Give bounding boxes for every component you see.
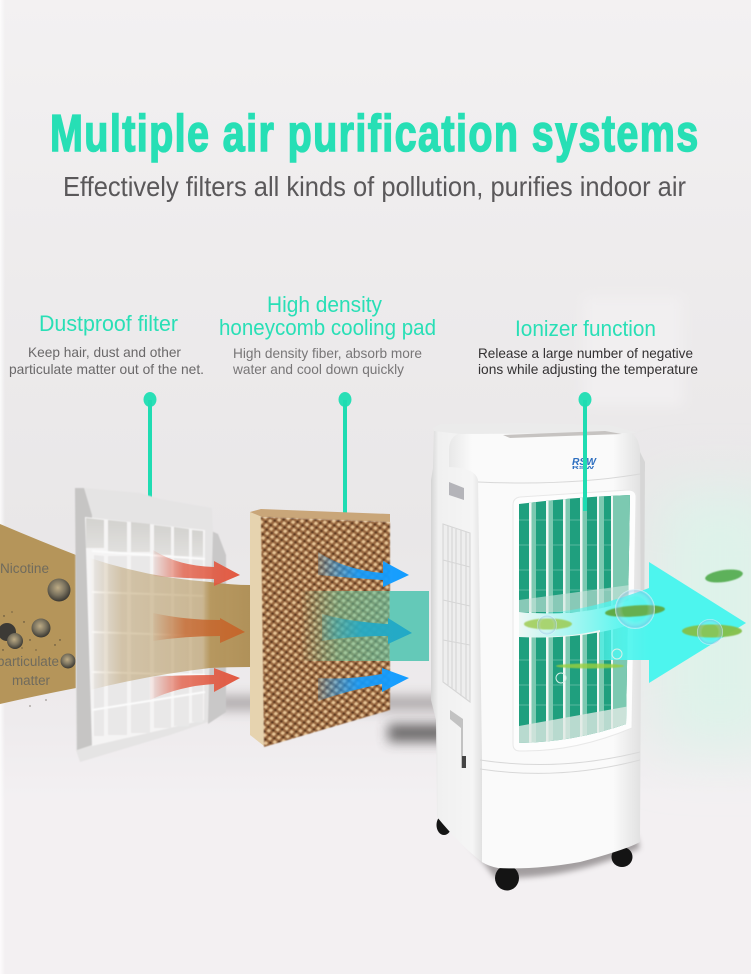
drain clip — [450, 710, 463, 768]
side panel — [431, 428, 483, 863]
polluted air stream — [0, 524, 76, 707]
panel: ionizer function text — [478, 316, 698, 377]
description: dustproof filter: particulate matter out of the net. — [9, 361, 204, 377]
teal clean air band — [300, 591, 429, 661]
connector line: ionizer — [578, 392, 591, 511]
description: ionizer function — [478, 345, 698, 377]
connector line: dustproof filter — [143, 392, 156, 513]
clean air arrow — [519, 562, 746, 683]
panel: honeycomb cooling pad text — [219, 292, 436, 377]
blue arrows — [318, 552, 412, 701]
window frame — [513, 490, 636, 751]
panel: dustproof filter text — [9, 311, 204, 377]
cooler casters — [436, 815, 632, 890]
heading: honeycomb cooling pad — [219, 292, 436, 340]
label: particulate matter: matter — [12, 673, 50, 688]
side vent grille — [443, 524, 470, 702]
label: particulate matter — [0, 654, 59, 688]
green louvre window — [519, 495, 630, 743]
description: ionizer function: Release a large number of negative — [478, 345, 693, 361]
dustproof filter frame — [75, 488, 226, 762]
description: honeycomb cooling pad: water and cool down quickly — [232, 361, 404, 377]
side clip — [640, 452, 645, 660]
heading: ionizer function: Ionizer function — [515, 316, 656, 341]
air cooler unit — [431, 423, 645, 890]
floor shadow — [455, 825, 640, 878]
honeycomb cooling pad — [250, 392, 390, 747]
brand logo: RSW — [572, 456, 597, 468]
seam lines — [478, 474, 640, 773]
leaves and bubbles — [524, 567, 744, 683]
front shell — [449, 431, 642, 868]
subtitle: Effectively filters all kinds of pollution, purifies indoor air — [63, 171, 686, 202]
heading: dustproof filter: Dustproof filter — [39, 311, 178, 336]
description: dustproof filter — [9, 344, 204, 377]
middle band — [519, 600, 630, 638]
polluted air passing through filter — [90, 558, 250, 690]
description: honeycomb cooling pad — [232, 345, 422, 377]
title: Multiple air purification systems — [50, 104, 698, 162]
control strip — [503, 431, 622, 438]
description: ionizer function: ions while adjusting the temperature — [478, 361, 698, 377]
description: honeycomb cooling pad: High density fiber, absorb more — [233, 345, 422, 361]
handle recess — [449, 482, 464, 500]
connector line: cooling pad — [338, 392, 351, 513]
heading: honeycomb cooling pad: High density — [267, 292, 382, 317]
red arrows — [150, 550, 245, 700]
heading: honeycomb cooling pad: honeycomb cooling pad — [219, 315, 436, 340]
top control lid — [433, 423, 638, 434]
brand logo: RSW — [572, 465, 596, 470]
description: dustproof filter: Keep hair, dust and other — [28, 344, 181, 360]
label: nicotine: Nicotine — [0, 561, 49, 576]
